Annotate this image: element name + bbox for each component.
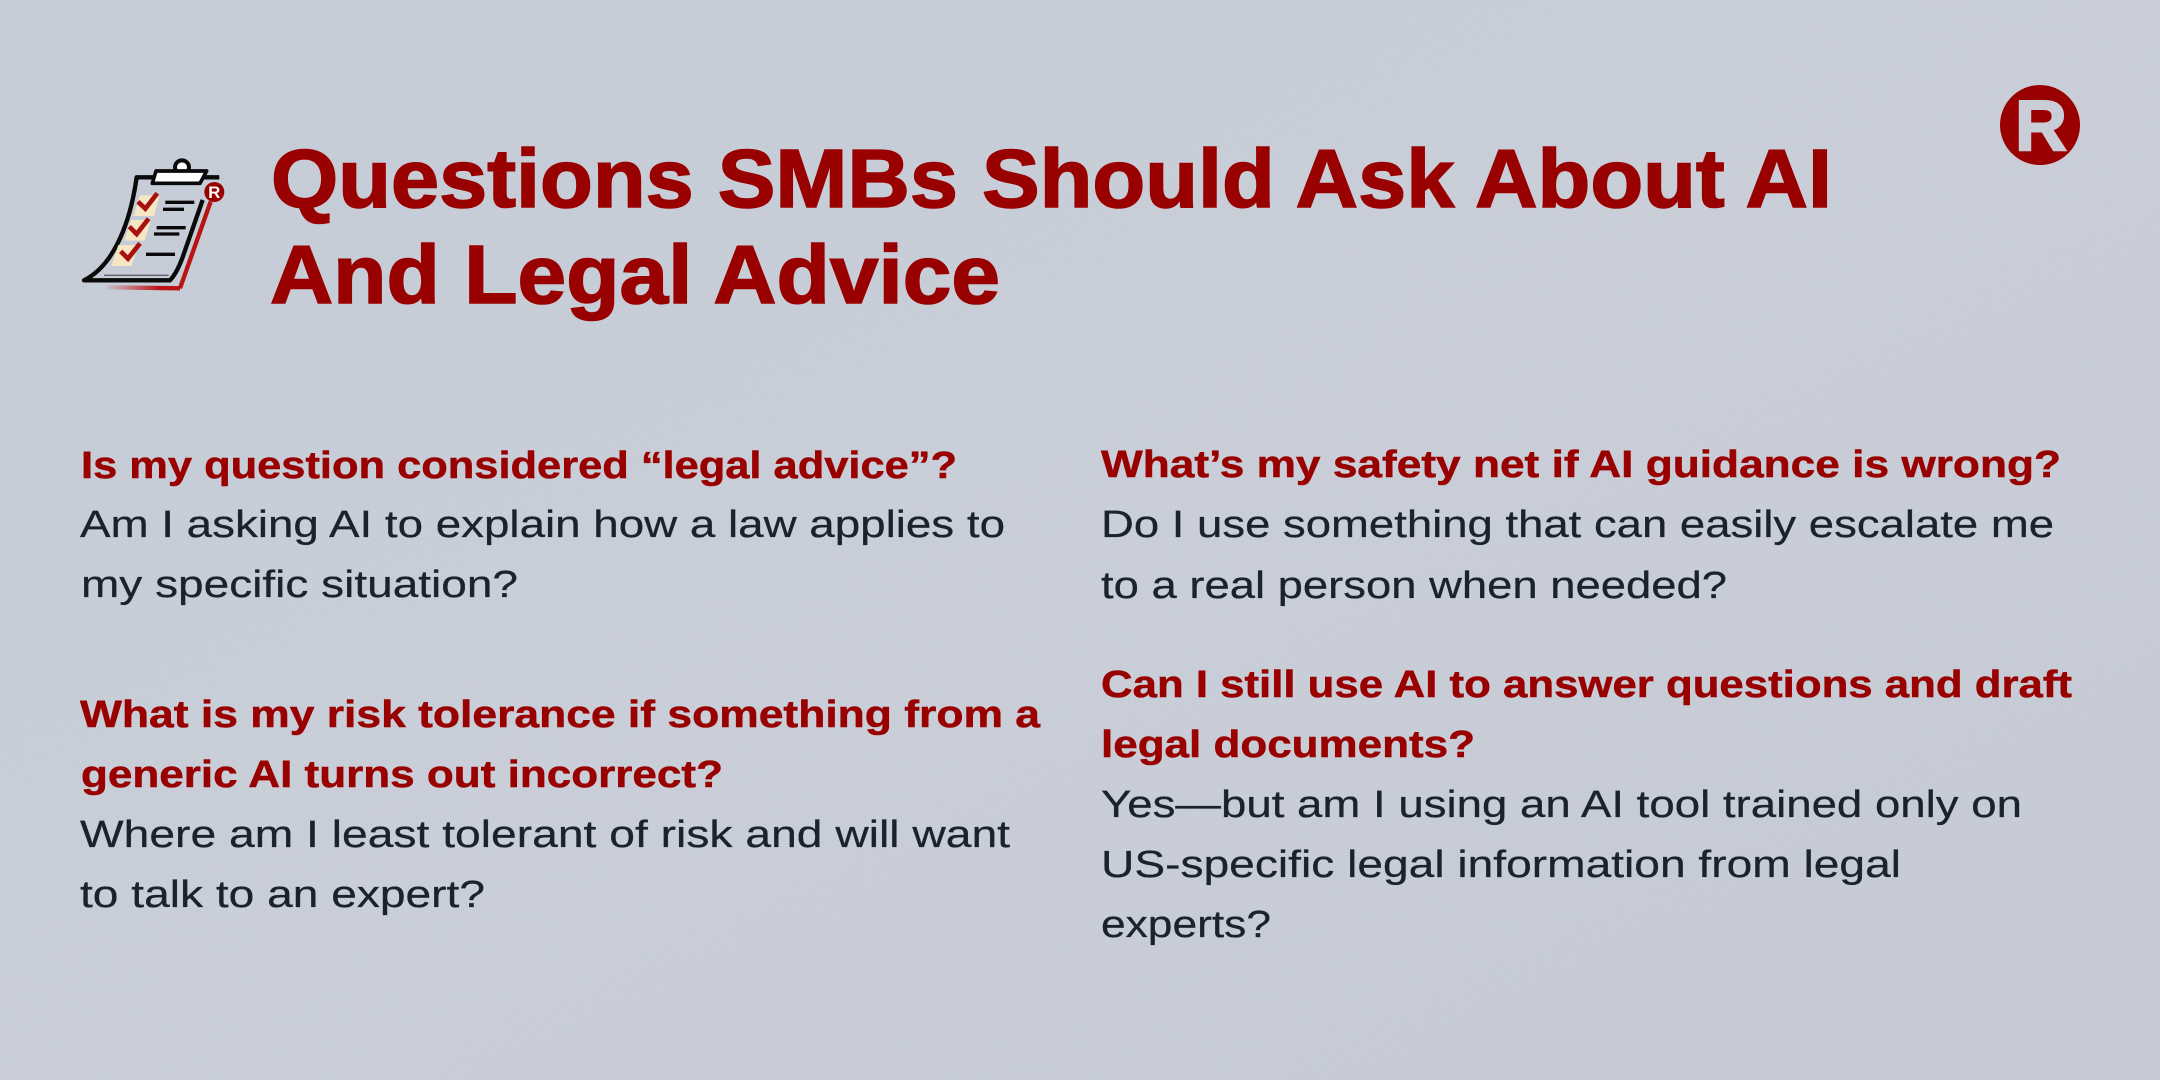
text block: safety net question: What’s my safety net if AI guidance is wrong?	[1101, 444, 2061, 486]
text block: legal advice question	[80, 445, 1005, 606]
text block: risk tolerance question: Where am I least tolerant of risk and will want	[80, 814, 1011, 856]
icon: clipboard checklist: R	[208, 183, 220, 202]
text block: safety net question	[1101, 444, 2061, 607]
title: And Legal Advice	[270, 228, 1000, 321]
text block: drafting question: legal documents?	[1101, 724, 1475, 766]
logo: R badge	[2000, 85, 2080, 166]
text block: risk tolerance question: What is my risk tolerance if something from a	[80, 694, 1041, 736]
text block: safety net question: to a real person when needed?	[1101, 565, 1727, 607]
text block: legal advice question: Is my question considered “legal advice”?	[81, 445, 957, 487]
logo: R badge: R	[2015, 87, 2067, 166]
text block: drafting question	[1101, 664, 2072, 946]
text block: drafting question: US-specific legal information from legal	[1101, 844, 1901, 886]
title: Questions SMBs Should Ask About AI	[271, 132, 1832, 225]
text block: risk tolerance question	[80, 694, 1041, 916]
text block: drafting question: Yes—but am I using an AI tool trained only on	[1101, 784, 2022, 826]
text block: drafting question: experts?	[1101, 904, 1271, 946]
text block: safety net question: Do I use something that can easily escalate me	[1101, 504, 2054, 546]
text block: legal advice question: Am I asking AI to explain how a law applies to	[80, 504, 1005, 546]
text block: legal advice question: my specific situation?	[81, 564, 518, 606]
title	[270, 132, 1832, 321]
text block: drafting question: Can I still use AI to answer questions and draft	[1101, 664, 2072, 706]
text block: risk tolerance question: generic AI turns out incorrect?	[81, 754, 723, 796]
icon: clipboard checklist	[84, 160, 224, 288]
text block: risk tolerance question: to talk to an expert?	[80, 874, 485, 916]
